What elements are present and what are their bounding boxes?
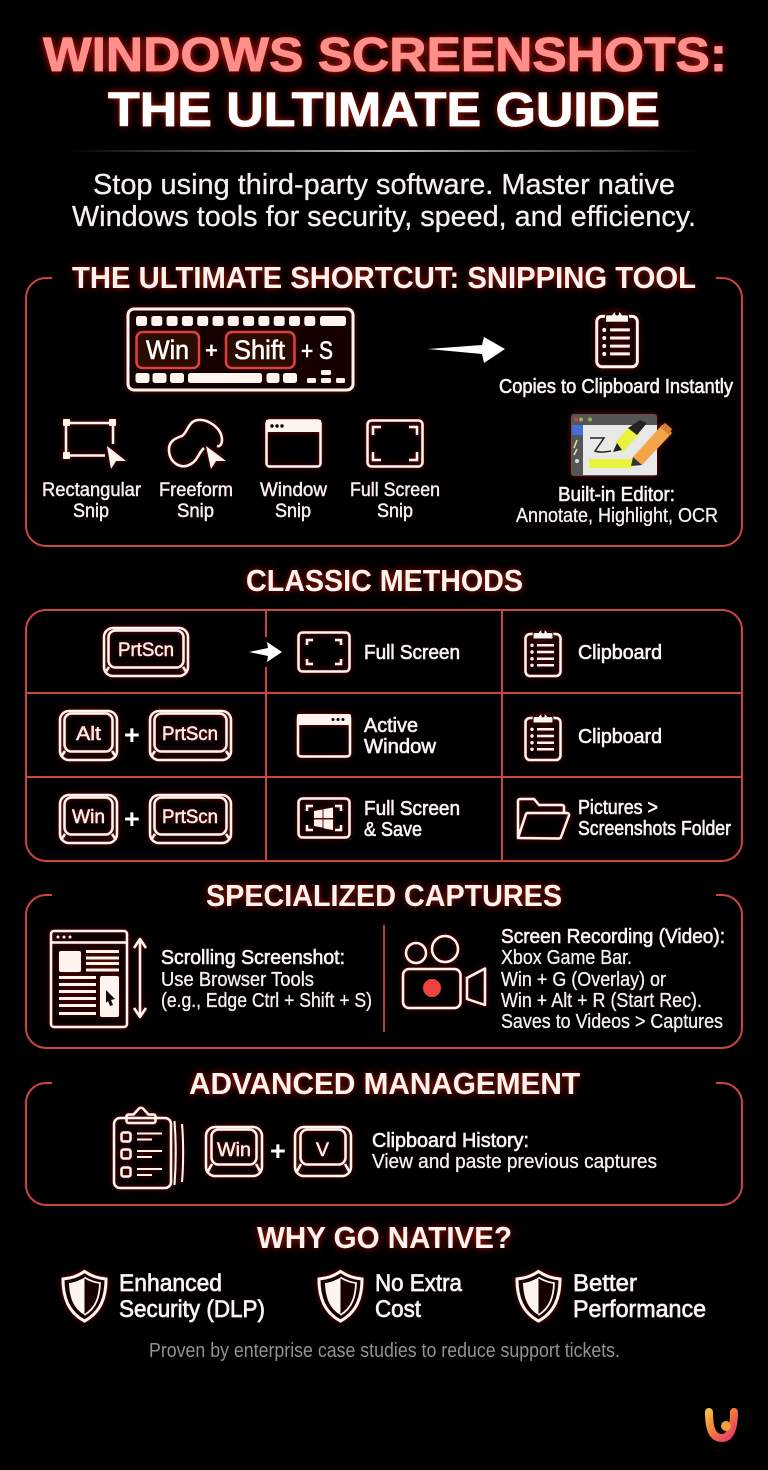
key: Alt [60,711,117,760]
benefit: no extra cost [319,1270,463,1323]
text: screen recording: Saves to Videos > Captures [501,1011,723,1033]
benefit: better performance [517,1270,706,1323]
icon: active window [297,714,351,756]
label: no extra cost: Cost [375,1296,421,1323]
label: copies to clipboard: Copies to Clipboard Instantly [499,376,733,398]
key: PrtScn [150,795,231,843]
label: full screen and save: & Save [364,819,422,841]
icon: clipboard [526,630,560,676]
panel: specialized captures [26,878,742,1048]
label: full screen snip: Full Screen [350,480,440,501]
subtitle: Windows tools for security, speed, and efficiency. [72,201,696,233]
icon: shield [517,1272,560,1321]
key: PrtScn: PrtScn [162,724,218,745]
key: Win [60,795,117,843]
text: scrolling screenshot: Scrolling Screenshot: [161,947,345,969]
icon: clipboard [526,714,560,760]
label: better performance: Better [573,1270,637,1297]
icon: video camera [403,936,485,1008]
panel: classic methods table [26,610,742,861]
label: window snip [260,480,327,522]
panel: the ultimate shortcut [26,260,742,546]
label: active window: Window [364,736,437,758]
heading: why go native: WHY GO NATIVE? [257,1220,512,1255]
plus: + [124,804,140,834]
key: Alt: Alt [76,724,102,745]
label: screenshots folder: Screenshots Folder [578,818,731,840]
icon: keyboard with Win + Shift + S: + S [301,337,333,365]
text: screen recording: Win + Alt + R (Start Rec). [501,990,702,1012]
plus: + [270,1136,286,1166]
label: better performance [573,1270,706,1323]
text: clipboard history: Clipboard History: [372,1130,529,1152]
label: full screen and save [364,798,460,841]
plus: + [124,720,140,750]
label: full screen and save: Full Screen [364,798,460,820]
label: screenshots folder [578,797,731,840]
label: better performance: Performance [573,1296,706,1323]
label: active window [364,715,437,758]
label: no extra cost: No Extra [375,1270,463,1297]
text: clipboard history: View and paste previous captures [372,1151,657,1173]
key: Win: Win [217,1140,251,1161]
label: rectangular snip: Rectangular [42,480,142,501]
label: no extra cost [375,1270,463,1323]
key: V: V [316,1140,329,1161]
label: freeform snip [159,480,233,522]
text: scrolling screenshot [161,947,372,1012]
icon: record dot [423,979,441,997]
text: screen recording: Win + G (Overlay) or [501,969,666,991]
key: Win [206,1127,262,1176]
label: clipboard: Clipboard [578,726,662,748]
icon: up-down arrow [134,939,146,1017]
heading: classic methods: CLASSIC METHODS [246,563,523,598]
icon: full screen and save [298,798,350,838]
heading: specialized captures: SPECIALIZED CAPTURES [206,878,562,913]
heading: advanced management: ADVANCED MANAGEMENT [189,1066,580,1101]
label: active window: Active [364,715,418,737]
text: clipboard history [372,1130,657,1173]
icon: freeform snip [169,420,226,469]
icon: shield [319,1272,362,1321]
label: enhanced security: Enhanced [119,1270,222,1297]
icon: shield [63,1272,106,1321]
icon: full screen snip [368,420,422,466]
icon: keyboard with Win + Shift + S: Shift [234,335,285,365]
label: window snip: Window [260,480,327,501]
label: freeform snip: Freeform [159,480,233,501]
label: freeform snip: Snip [177,501,214,522]
key: PrtScn [150,711,231,760]
heading: the ultimate shortcut: THE ULTIMATE SHORTCUT: SNIPPING TOOL [72,260,696,295]
icon: scrolling page [51,931,127,1027]
key: PrtScn: PrtScn [118,640,174,661]
label: screenshots folder: Pictures > [578,797,658,819]
label: built-in editor: Built-in Editor: [558,484,675,506]
logo [709,1412,734,1438]
label: rectangular snip: Snip [73,501,109,522]
label: full screen snip: Snip [377,501,413,522]
subtitle: Stop using third-party software. Master native [93,169,675,201]
label: window snip: Snip [275,501,311,522]
panel: advanced management [26,1066,742,1205]
icon: clipboard [597,311,637,367]
key: PrtScn [104,628,188,676]
label: enhanced security: Security (DLP) [119,1296,265,1323]
text: screen recording: Screen Recording (Video): [501,926,725,948]
label: enhanced security [119,1270,265,1323]
icon: keyboard with Win + Shift + S [128,309,353,390]
text: screen recording: Xbox Game Bar. [501,947,632,969]
label: rectangular snip [42,480,142,522]
benefit: enhanced security [63,1270,265,1323]
title line 1: WINDOWS SCREENSHOTS: [43,29,727,82]
title line 2: THE ULTIMATE GUIDE [108,84,660,137]
key: V [295,1127,351,1176]
icon: built-in editor window [571,414,672,476]
subtitle [72,169,696,233]
arrow: PrtScn to full screen [249,642,282,662]
key: PrtScn: PrtScn [162,807,218,828]
icon: clipboard stack [114,1108,183,1188]
title [43,29,727,137]
icon: keyboard with Win + Shift + S: Win [146,335,189,365]
icon: keyboard with Win + Shift + S: + [205,338,218,363]
label: built-in editor [516,484,718,527]
label: built-in editor: Annotate, Highlight, OCR [516,505,718,527]
label: full screen snip [350,480,440,522]
label: clipboard: Clipboard [578,642,662,664]
text: scrolling screenshot: Use Browser Tools [161,969,314,991]
icon: window snip [266,420,321,466]
key: Win: Win [72,807,105,828]
label: full screen: Full Screen [364,642,460,664]
arrow: shortcut to clipboard [428,337,505,363]
icon: rectangular snip [63,419,126,469]
text: screen recording [501,926,725,1033]
icon: full screen [298,632,350,672]
text: scrolling screenshot: (e.g., Edge Ctrl + Shift + S) [161,990,372,1012]
footnote: Proven by enterprise case studies to reduce support tickets. [149,1340,620,1362]
icon: folder [518,799,569,839]
